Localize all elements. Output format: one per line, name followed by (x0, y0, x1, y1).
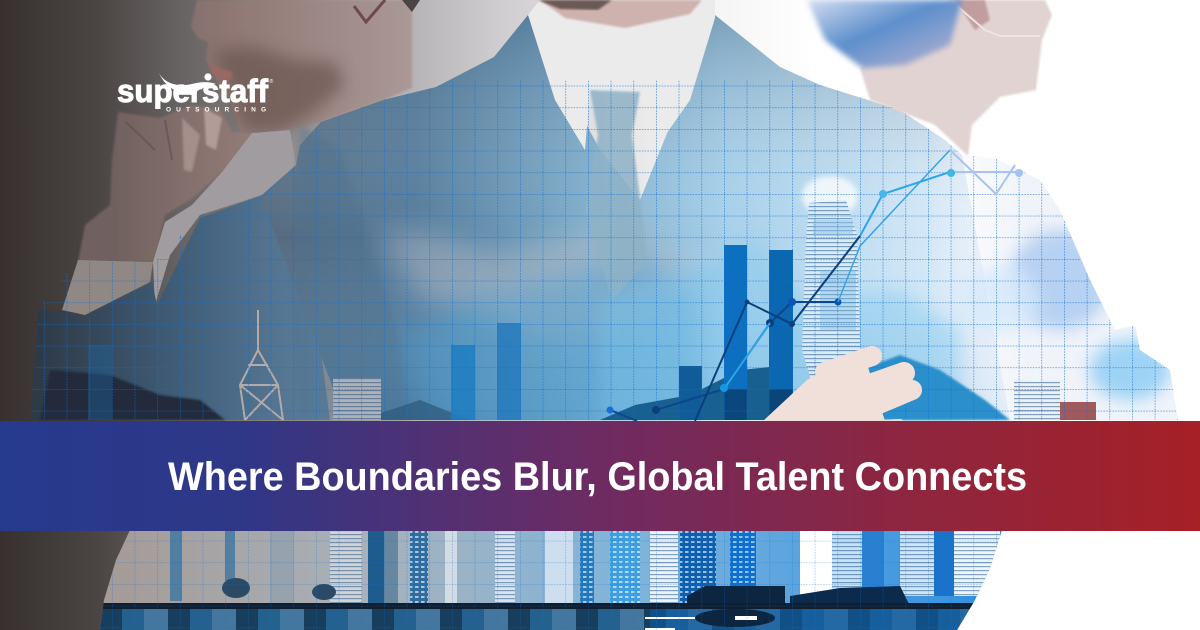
person: woman's hair (807, 0, 962, 68)
person: center man's shirt collar (528, 0, 715, 150)
waterfront trees and piers (222, 578, 908, 603)
skyline: right building (1014, 350, 1096, 420)
line chart (606, 150, 1023, 421)
logo registered mark: ® (270, 78, 274, 85)
skyline: glass tower (802, 176, 862, 410)
dotted grid overlay (30, 80, 1180, 421)
logo tagline: OUTSOURCING (166, 106, 266, 114)
water strip (90, 603, 1010, 630)
person: left man's hand and forearm (78, 105, 255, 262)
logo dot (204, 73, 212, 81)
person: left man's shirt (153, 130, 296, 305)
line: dark series (606, 236, 860, 421)
person: left man's face (191, 0, 420, 132)
logo: superstaff outsourcing (117, 73, 274, 114)
skyline: small building (333, 378, 381, 420)
person: shirt cuff (62, 260, 153, 315)
lower city panel (90, 530, 1010, 630)
person: left man's suit (30, 165, 330, 420)
person: center man's tie (585, 90, 648, 300)
person: center man's suit (262, 15, 1010, 420)
logo swoosh (159, 73, 216, 95)
light reflections (645, 617, 700, 630)
logo wordmark: superstaff (117, 73, 268, 109)
headline banner (0, 421, 1200, 531)
bar chart (88, 245, 793, 420)
person: woman's torso (955, 158, 1178, 420)
skyline: left lattice tower (240, 310, 283, 420)
scenery: clouds and hills (40, 240, 1010, 420)
headline text: Where Boundaries Blur, Global Talent Connects (168, 455, 1027, 499)
person: center man's hand (763, 348, 912, 424)
person: woman's neck and face (860, 0, 1052, 156)
buildings (170, 531, 1000, 603)
line: light series (720, 150, 1023, 392)
